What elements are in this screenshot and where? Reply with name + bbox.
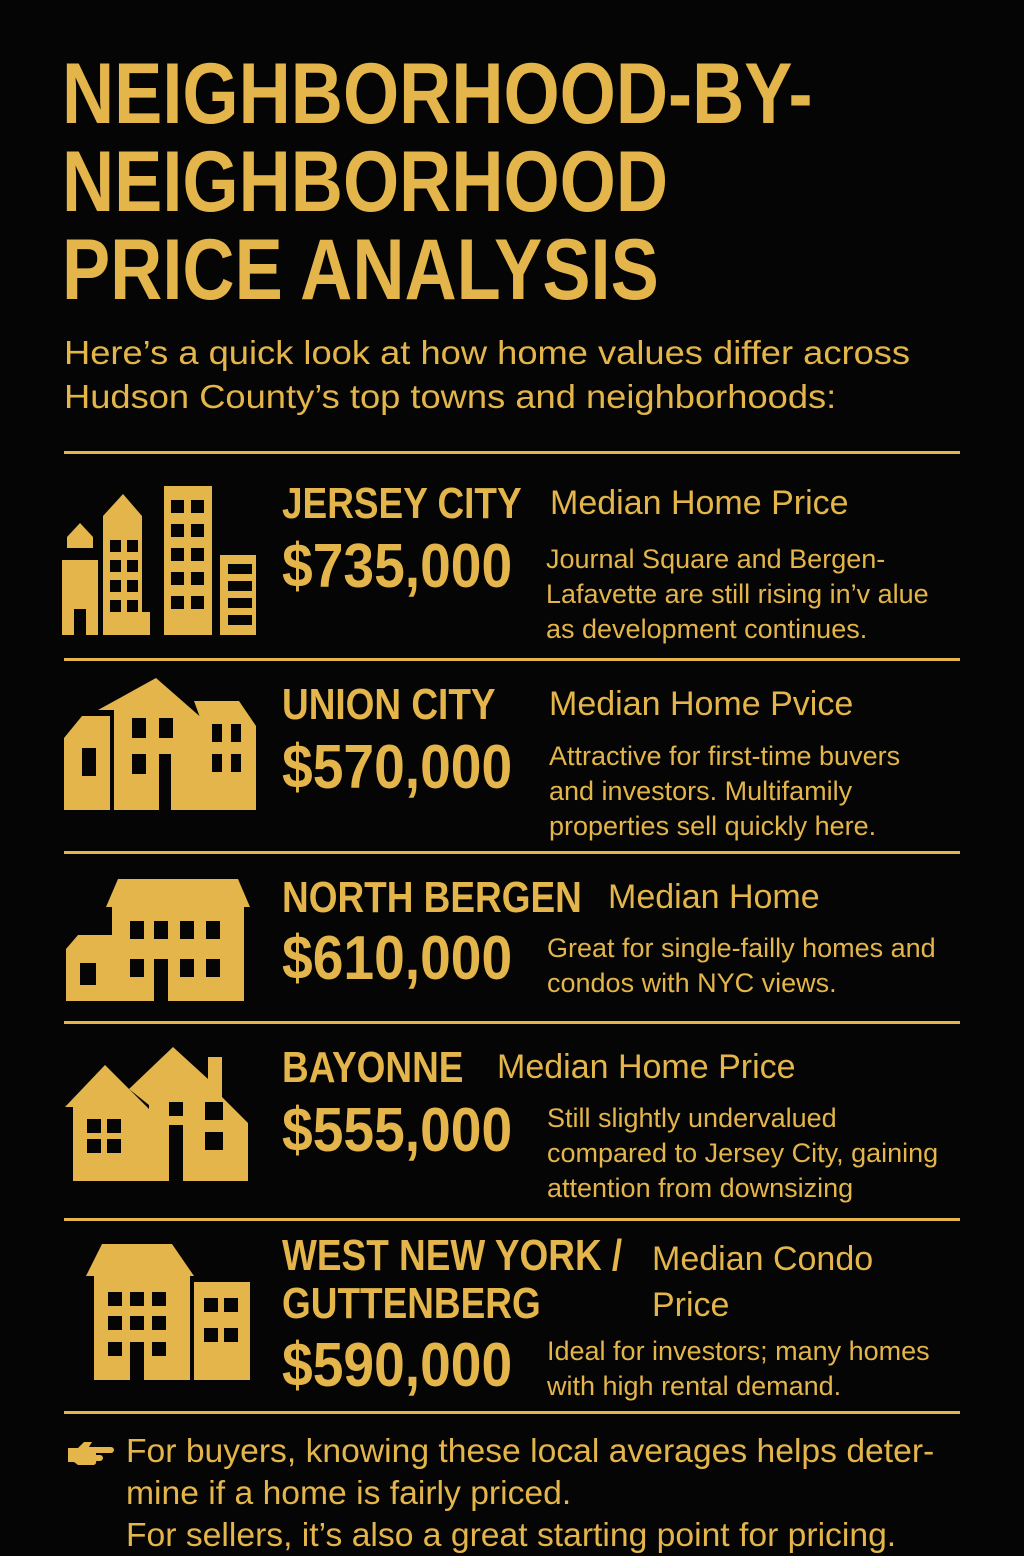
description bbox=[547, 1336, 930, 1401]
description: condos with NYC views. bbox=[547, 968, 837, 998]
description bbox=[549, 741, 900, 841]
description: attention from downsizing bbox=[547, 1173, 853, 1203]
name: WEST NEW YORK / bbox=[282, 1231, 622, 1280]
title: NEIGHBORHOOD-BY- bbox=[62, 46, 813, 142]
panel: union city bbox=[64, 678, 900, 841]
footer note bbox=[126, 1432, 934, 1553]
footer note: mine if a home is fairly priced. bbox=[126, 1474, 571, 1511]
footer note: For buyers, knowing these local averages helps deter- bbox=[126, 1432, 934, 1469]
description: and investors. Multifamily bbox=[549, 776, 852, 806]
title bbox=[62, 46, 813, 318]
name: NORTH BERGEN bbox=[282, 873, 582, 922]
panel: west new york / guttenberg bbox=[86, 1231, 930, 1401]
label: Median Home bbox=[608, 878, 820, 916]
price: $590,000 bbox=[282, 1331, 512, 1400]
name: BAYONNE bbox=[282, 1043, 463, 1092]
icon: houses bbox=[64, 678, 256, 810]
price: $735,000 bbox=[282, 532, 512, 601]
panel: north bergen bbox=[66, 873, 936, 1001]
name: GUTTENBERG bbox=[282, 1279, 541, 1328]
subtitle bbox=[64, 334, 910, 415]
description: compared to Jersey City, gaining bbox=[547, 1138, 938, 1168]
icon: pointing hand bbox=[68, 1442, 114, 1465]
description bbox=[546, 544, 929, 644]
footer note: For sellers, it’s also a great starting point for pricing. bbox=[126, 1516, 896, 1553]
description: Attractive for first-time buvers bbox=[549, 741, 900, 771]
icon: city skyline bbox=[62, 486, 256, 635]
description: Still slightly undervalued bbox=[547, 1103, 837, 1133]
label: Median Home Pvice bbox=[549, 685, 853, 723]
icon: two houses bbox=[65, 1047, 248, 1181]
icon: apartment bbox=[66, 879, 250, 1001]
label: Median Condo bbox=[652, 1240, 873, 1278]
title: NEIGHBORHOOD bbox=[62, 134, 668, 230]
subtitle: Here’s a quick look at how home values differ across bbox=[64, 334, 910, 371]
description bbox=[547, 1103, 938, 1203]
label: Median Home Price bbox=[497, 1048, 796, 1086]
panel: bayonne bbox=[65, 1043, 938, 1203]
title: PRICE ANALYSIS bbox=[62, 222, 659, 318]
label: Price bbox=[652, 1286, 729, 1324]
description: with high rental demand. bbox=[547, 1371, 841, 1401]
subtitle: Hudson County’s top towns and neighborhoods: bbox=[64, 378, 836, 415]
price: $570,000 bbox=[282, 733, 512, 802]
description: Great for single-failly homes and bbox=[547, 933, 936, 963]
price: $555,000 bbox=[282, 1096, 512, 1165]
label: Median Home Price bbox=[550, 484, 849, 522]
name: UNION CITY bbox=[282, 680, 496, 729]
name: JERSEY CITY bbox=[282, 479, 522, 528]
description: Journal Square and Bergen- bbox=[546, 544, 885, 574]
description: Ideal for investors; many homes bbox=[547, 1336, 930, 1366]
label bbox=[652, 1240, 873, 1324]
panel: jersey city bbox=[62, 479, 929, 644]
description bbox=[547, 933, 936, 998]
description: Lafavette are still rising in’v alue bbox=[546, 579, 929, 609]
name bbox=[282, 1231, 622, 1328]
description: as development continues. bbox=[546, 614, 867, 644]
price: $610,000 bbox=[282, 924, 512, 993]
icon: building bbox=[86, 1244, 250, 1380]
description: properties sell quickly here. bbox=[549, 811, 876, 841]
